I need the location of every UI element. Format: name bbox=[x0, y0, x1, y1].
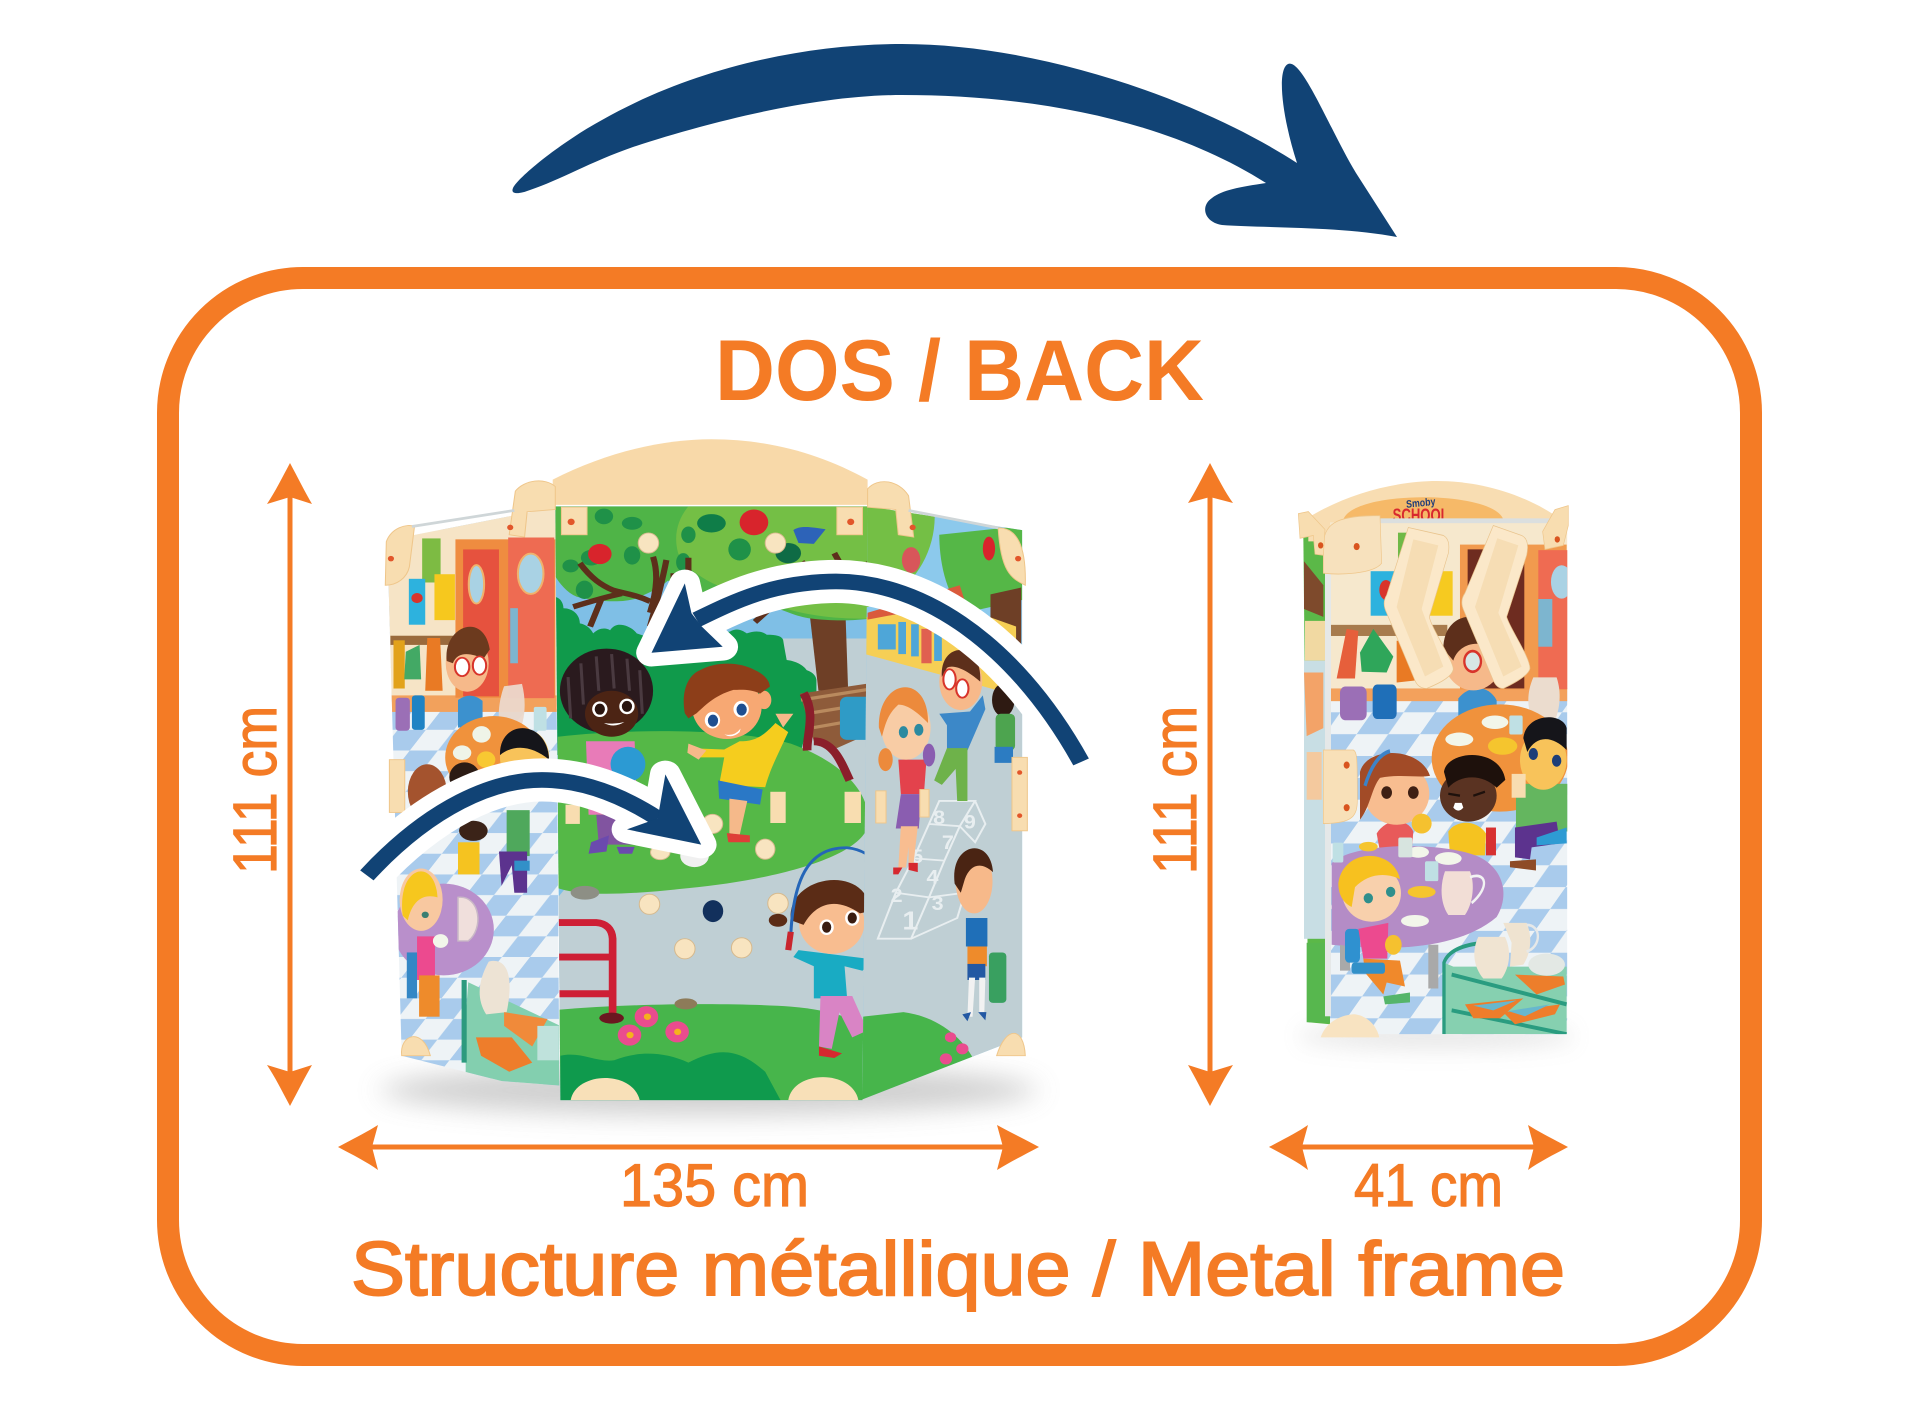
tree canopy bbox=[553, 506, 873, 620]
arrow: upper navy curved arrow pointing left bbox=[652, 581, 1081, 762]
panel: right schoolyard side: 2 bbox=[891, 886, 903, 907]
child: dark-skinned child reading bbox=[992, 683, 1015, 763]
right grass and flowers bbox=[862, 1012, 975, 1104]
climbing holds bbox=[638, 533, 788, 959]
arrow: lower navy curved arrow pointing right bbox=[367, 774, 701, 875]
child: boy with yellow shirt bbox=[684, 664, 793, 842]
smiling boy in yellow bbox=[1440, 755, 1505, 855]
frame: bolts bbox=[1318, 536, 1560, 811]
posters bbox=[1398, 532, 1406, 558]
product: folded playset, side view bbox=[1297, 481, 1577, 1048]
flowers bbox=[618, 1006, 689, 1046]
heading: DOS / BACK: DOS / BACK bbox=[715, 323, 1204, 419]
panel: right schoolyard side: 9 bbox=[964, 812, 976, 833]
green shelf and trays bbox=[464, 961, 560, 1086]
frame: rounded orange border bbox=[168, 278, 1751, 1355]
panel: central playground side bbox=[550, 503, 893, 1104]
child with glasses bbox=[446, 627, 490, 728]
tree trunk bbox=[810, 618, 848, 691]
panel: right schoolyard side: 7 bbox=[942, 833, 954, 854]
boy at right with black hair bbox=[1510, 717, 1568, 870]
boy with glasses behind socks bbox=[1443, 617, 1503, 716]
bracket on right bbox=[1512, 774, 1526, 798]
frame: top corners bbox=[1298, 506, 1568, 555]
top arch with logo: SCHOOL bbox=[1393, 505, 1449, 526]
purple table with blonde child bbox=[393, 868, 494, 1017]
arrow: width of open set bbox=[338, 1125, 1039, 1170]
girl with blue headband bbox=[1360, 751, 1432, 851]
leaves bbox=[562, 508, 802, 599]
label: 135 cm: 135 cm bbox=[620, 1152, 809, 1219]
dark hedge bbox=[553, 597, 816, 755]
coat rail with coats and bags bbox=[1331, 625, 1447, 636]
socks: first climbing hold bbox=[1384, 527, 1453, 688]
doors bbox=[1460, 545, 1567, 690]
top arch with logo bbox=[1308, 481, 1558, 541]
jug top right bbox=[1528, 677, 1560, 720]
foot blocks bbox=[571, 1078, 640, 1100]
seated children at orange table bbox=[408, 728, 549, 893]
label: 41 cm: 41 cm bbox=[1354, 1152, 1503, 1219]
child: red-haired girl bbox=[878, 687, 935, 874]
child: boy with book and backpack bbox=[954, 848, 1006, 1021]
panel: folded side strip bbox=[1303, 535, 1330, 1024]
label: 111 cm folded: 111 cm bbox=[1141, 706, 1209, 874]
apples and bird bbox=[588, 544, 612, 564]
red bars bbox=[558, 923, 613, 1017]
panel: canteen main face bbox=[1330, 522, 1572, 1038]
frame: rail and side post bbox=[1325, 518, 1553, 1016]
floor shadow bbox=[381, 1065, 1037, 1115]
panel: right schoolyard side: 4 bbox=[926, 868, 939, 888]
frame: beige fittings and rails bbox=[385, 481, 1027, 1056]
hopscotch grid with numbers bbox=[878, 801, 985, 939]
branches bbox=[573, 553, 888, 627]
frame: corner brace bbox=[1323, 516, 1382, 574]
orange table bbox=[445, 716, 530, 774]
frame: hinge plate bbox=[1323, 750, 1357, 824]
product: open playset, back view bbox=[367, 439, 1081, 1115]
panel: right schoolyard side: 1 bbox=[902, 906, 918, 935]
arrow: large navy curved arrow bbox=[512, 44, 1397, 237]
purple table bbox=[1332, 846, 1503, 948]
top arch with logo: Smoby bbox=[1406, 496, 1436, 511]
panel: right schoolyard side bbox=[862, 503, 1026, 1104]
child: dark-skinned girl with braids bbox=[560, 649, 653, 854]
arrow: width of folded set bbox=[1269, 1125, 1568, 1170]
arrow: height of open set bbox=[267, 463, 312, 1106]
floor shadow bbox=[1297, 1024, 1577, 1048]
child: boy with glasses and green trousers bbox=[934, 650, 985, 801]
blonde girl bbox=[1338, 856, 1410, 1004]
stones bbox=[571, 886, 599, 900]
socks: second climbing hold bbox=[1462, 526, 1530, 688]
frame: beige top arch bbox=[553, 439, 868, 505]
panel: right schoolyard side: 8 bbox=[933, 808, 945, 829]
bottom grass bbox=[558, 1004, 873, 1104]
panel brackets bbox=[566, 792, 861, 824]
panel: right schoolyard side: 3 bbox=[932, 894, 944, 915]
caption: metal frame: Structure métallique / Metal frame bbox=[351, 1227, 1565, 1312]
panel: right schoolyard side: 5 bbox=[911, 847, 923, 868]
orange table bbox=[1432, 704, 1568, 812]
label: 111 cm open: 111 cm bbox=[221, 706, 289, 874]
bench with backpack bbox=[800, 684, 866, 782]
bolts bbox=[388, 519, 1022, 818]
panel: left classroom side bbox=[381, 503, 560, 1099]
arrow: height of folded set bbox=[1188, 463, 1233, 1106]
foot block bbox=[1321, 1014, 1379, 1037]
green shelf with jugs and trays bbox=[1444, 923, 1567, 1034]
child: girl with skipping rope bbox=[768, 846, 864, 1058]
school building bbox=[865, 585, 1016, 695]
jug and glass on table bbox=[498, 684, 525, 724]
jug on purple table bbox=[1442, 871, 1473, 915]
lawn bbox=[558, 731, 869, 894]
